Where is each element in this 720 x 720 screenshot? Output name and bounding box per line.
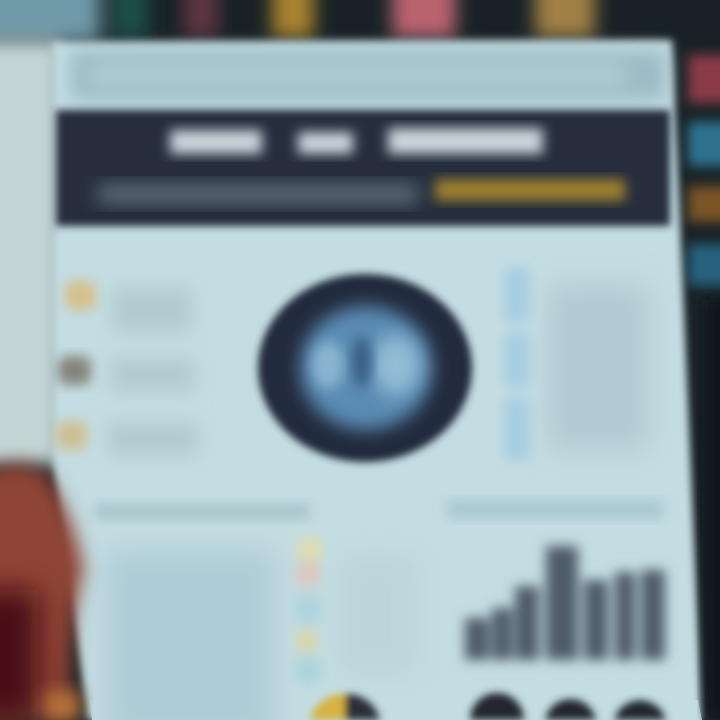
icon: grey marker	[58, 356, 91, 385]
legend text	[338, 555, 418, 675]
bar chart	[465, 546, 665, 660]
blue markers	[504, 268, 530, 460]
left background page	[0, 40, 62, 465]
right list	[504, 268, 648, 460]
right paper shadow	[706, 300, 720, 720]
globe emblem	[258, 274, 472, 462]
section heading left	[95, 503, 310, 520]
list text	[108, 288, 198, 456]
right text	[548, 285, 648, 450]
bottom-left text block	[105, 550, 275, 720]
right strip of coloured tabs	[688, 55, 720, 286]
gold highlight text	[435, 179, 625, 201]
icon: tan marker	[65, 281, 96, 310]
globe	[300, 306, 432, 430]
left list	[56, 281, 198, 456]
paper bottom edge fill	[90, 700, 702, 720]
pie chart	[310, 694, 380, 720]
dark circles row	[470, 693, 666, 720]
section heading right	[447, 500, 663, 519]
dark header panel	[56, 110, 670, 226]
subtitle	[98, 184, 418, 204]
legend swatches	[296, 538, 322, 682]
subheading band	[70, 50, 666, 100]
legend	[296, 538, 418, 682]
top strip of coloured blocks	[0, 0, 595, 42]
title	[170, 128, 543, 154]
icon: tan marker	[56, 421, 87, 450]
hand holding the sheet	[0, 465, 84, 720]
